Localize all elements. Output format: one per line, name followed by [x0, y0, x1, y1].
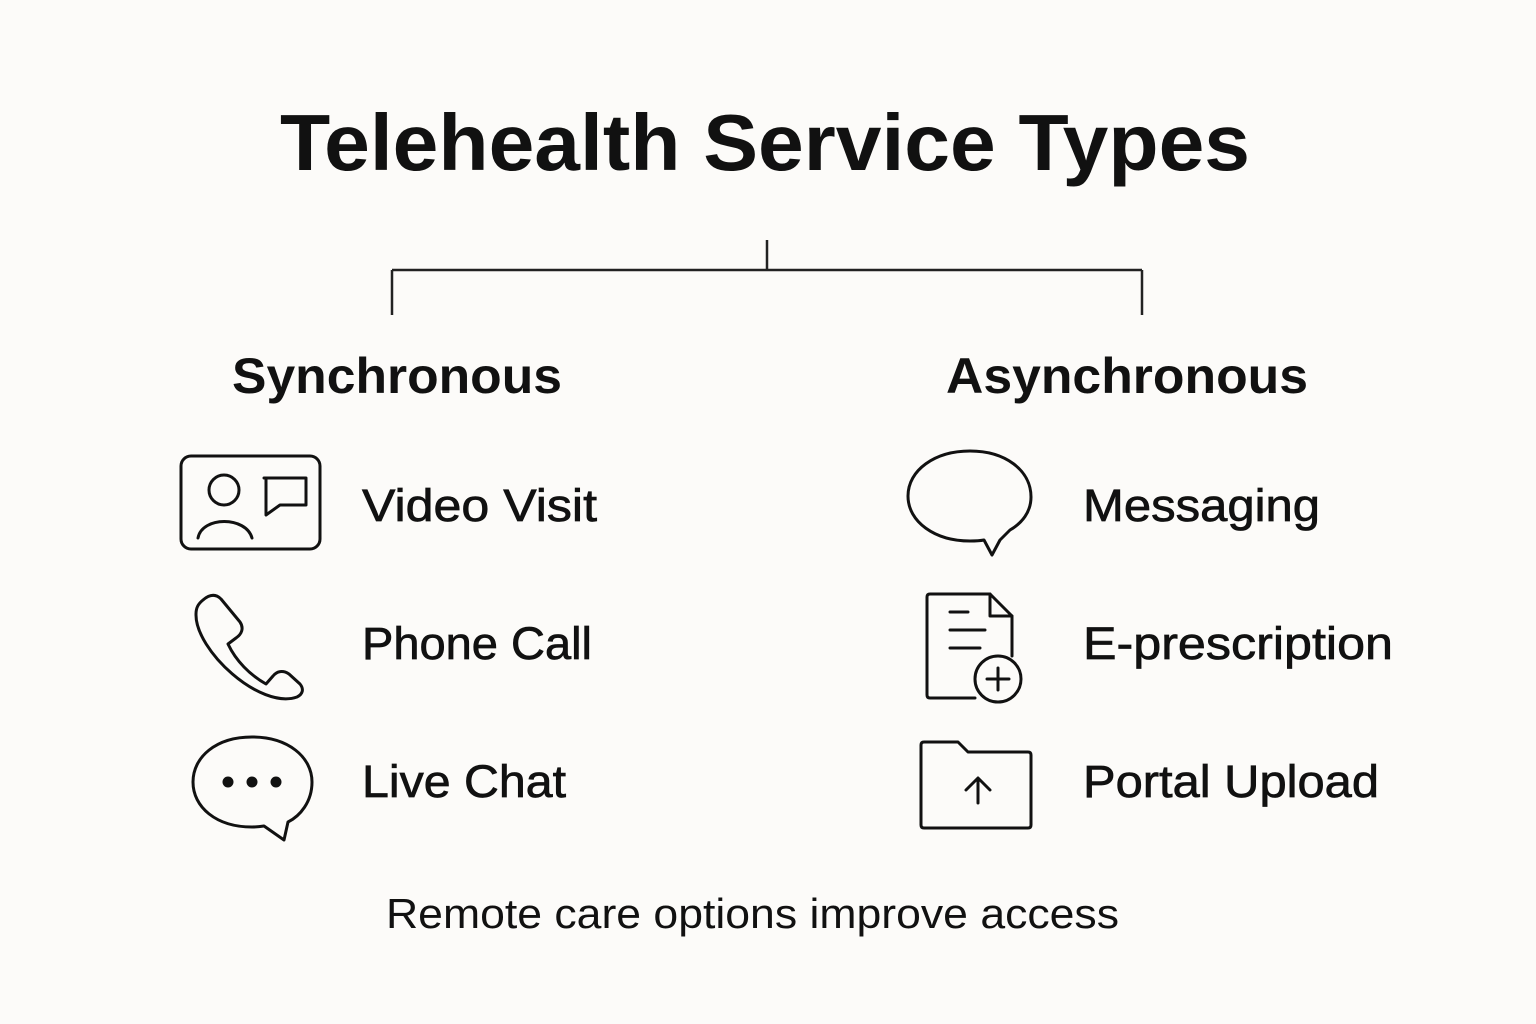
label: Messaging: Messaging	[1083, 480, 1320, 531]
icon: live chat	[193, 737, 312, 840]
label: Live Chat: Live Chat	[362, 756, 567, 807]
label: Phone Call: Phone Call	[362, 618, 592, 669]
icon: folder upload	[921, 742, 1031, 828]
label: Portal Upload: Portal Upload	[1083, 756, 1379, 807]
icon: e-prescription	[927, 594, 1021, 702]
label: E-prescription: E-prescription	[1083, 618, 1393, 669]
tree connector	[392, 240, 1142, 315]
heading: Synchronous: Synchronous	[232, 348, 562, 404]
heading: Asynchronous: Asynchronous	[946, 348, 1308, 404]
footer caption: Remote care options improve access	[386, 890, 1119, 937]
label: Video Visit: Video Visit	[362, 480, 598, 531]
icon: video visit	[181, 456, 320, 549]
title: Telehealth Service Types	[280, 98, 1250, 187]
icon: phone	[196, 595, 302, 699]
icon: messaging	[908, 451, 1031, 555]
